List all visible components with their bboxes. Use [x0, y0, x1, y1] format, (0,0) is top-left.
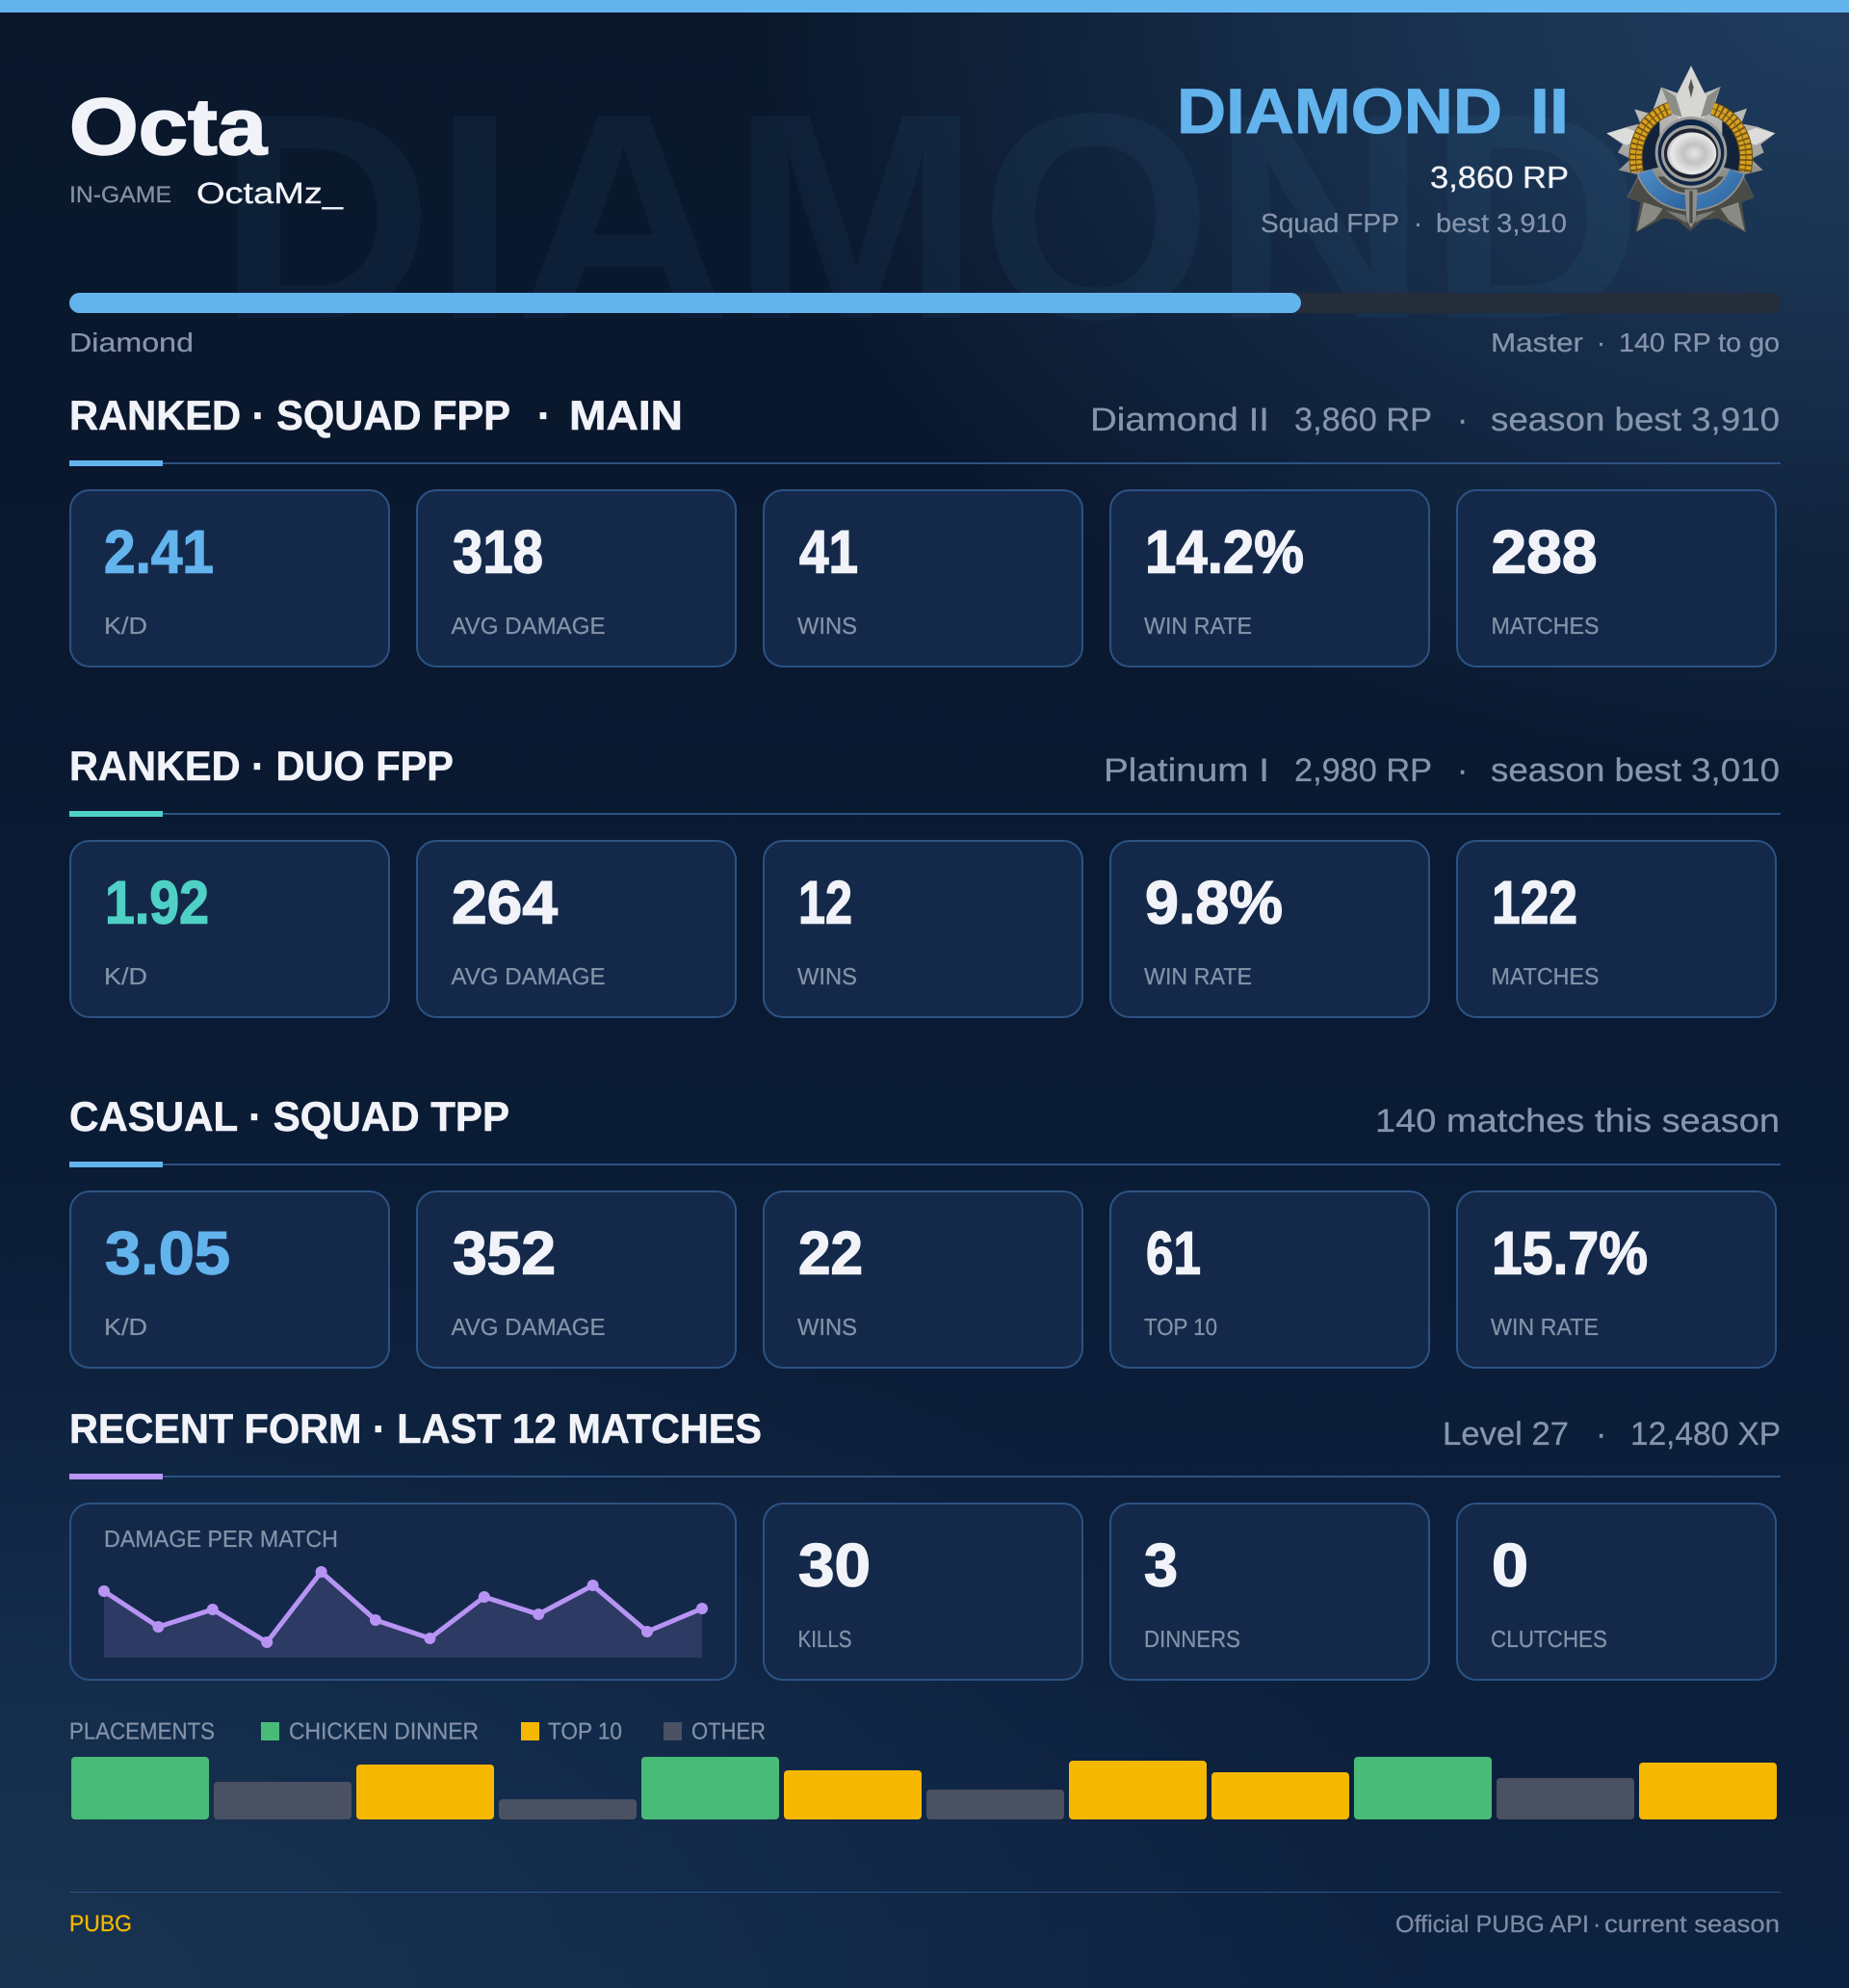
stat card: K/D: 1.92: [105, 869, 209, 936]
stat card: matches: MATCHES: [1491, 964, 1599, 990]
panel: ranked squad stats: [70, 490, 1776, 667]
footer source: official API note: [1395, 1911, 1780, 1938]
section meta: ·: [1457, 752, 1468, 789]
footer brand: PUBG: [69, 1911, 132, 1937]
footer source: official API note: ·: [1593, 1911, 1601, 1938]
section accent: [69, 460, 163, 466]
legend: top 10: TOP 10: [548, 1718, 622, 1745]
legend title: PLACEMENTS: [69, 1718, 215, 1745]
in-game name row: [69, 176, 344, 210]
section title: CASUAL · SQUAD TPP: [69, 1094, 509, 1140]
stat card: wins: [764, 841, 1082, 1017]
stat card: matches: [1457, 841, 1776, 1017]
stat card: wins: [764, 1191, 1082, 1368]
section meta: ·: [1596, 1416, 1606, 1452]
stat card: win rate: 15.7%: [1492, 1219, 1648, 1287]
section accent: [69, 811, 163, 817]
section accent: [69, 1162, 163, 1167]
stat card: matches: 288: [1491, 518, 1597, 586]
rank mode and best: ·: [1414, 208, 1422, 238]
icon: diamond rank medal: [1606, 65, 1775, 233]
next tier label: ·: [1597, 327, 1605, 357]
stat card: clutches: [1457, 1504, 1776, 1680]
stat card: K/D: K/D: [104, 1315, 147, 1341]
stat card: K/D: K/D: [104, 964, 147, 990]
stat card: win rate: 14.2%: [1145, 518, 1304, 586]
footer source: official API note: Official PUBG API: [1395, 1911, 1589, 1938]
progress fill: [69, 293, 1301, 313]
stat card: win rate: [1110, 490, 1429, 667]
placements bar chart: [71, 1757, 1777, 1819]
stat card: avg damage: 318: [453, 518, 543, 586]
watermark: DIAMOND: DIAMOND: [218, 52, 1643, 380]
stat card: wins: 12: [798, 869, 852, 936]
section meta: season best 3,010: [1491, 752, 1780, 789]
footer source: official API note: current season: [1604, 1911, 1780, 1938]
rank mode and best: [1261, 208, 1567, 238]
stat card: win rate: WIN RATE: [1144, 614, 1252, 640]
stat card: win rate: 9.8%: [1145, 869, 1283, 936]
section title: MAIN: [569, 393, 683, 439]
next tier label: [1491, 327, 1780, 357]
stat card: dinners: [1110, 1504, 1429, 1680]
stat card: matches: [1457, 490, 1776, 667]
next tier label: Master: [1491, 327, 1583, 357]
stat card: kills: 30: [798, 1531, 871, 1599]
panel: ranked duo stats: [70, 841, 1776, 1017]
stat card: win rate: WIN RATE: [1491, 1315, 1599, 1341]
stat card: dinners: DINNERS: [1144, 1627, 1240, 1653]
section meta: [1104, 752, 1780, 789]
stat card: wins: 41: [799, 518, 858, 586]
footer: [69, 1892, 1781, 1938]
chart label: DAMAGE PER MATCH: [104, 1527, 338, 1553]
stat card: clutches: CLUTCHES: [1491, 1627, 1607, 1653]
panel: recent form stats: [764, 1504, 1776, 1680]
rank summary block: [1177, 75, 1569, 238]
section meta: Level 27: [1443, 1416, 1569, 1452]
stat card: avg damage: AVG DAMAGE: [451, 1315, 605, 1341]
in-game handle: OctaMz_: [196, 176, 344, 210]
stat card: avg damage: [417, 1191, 736, 1368]
legend: top 10: [521, 1718, 622, 1745]
stat card: K/D: 3.05: [105, 1219, 230, 1287]
panel: casual squad stats: [70, 1191, 1776, 1368]
progress track: [69, 293, 1781, 313]
stat card: wins: WINS: [797, 614, 857, 640]
stat card: top 10: 61: [1146, 1219, 1201, 1287]
legend: other: OTHER: [691, 1718, 766, 1745]
stat card: K/D: [70, 490, 389, 667]
section header: ranked squad: [69, 393, 1781, 466]
stat card: K/D: 2.41: [104, 518, 214, 586]
stat card: avg damage: AVG DAMAGE: [451, 614, 605, 640]
rank points: 3,860 RP: [1430, 160, 1569, 195]
section title: RANKED · DUO FPP: [69, 744, 454, 790]
rank name: DIAMOND: [1177, 75, 1502, 146]
stat card: wins: WINS: [797, 1315, 857, 1341]
section meta: season best 3,910: [1491, 402, 1780, 438]
section meta: 140 matches this season: [1375, 1103, 1780, 1139]
placements legend: [69, 1718, 766, 1745]
stat card: avg damage: [417, 841, 736, 1017]
stat card: K/D: [70, 841, 389, 1017]
section header: recent form: [69, 1406, 1781, 1479]
stat card: win rate: WIN RATE: [1144, 964, 1252, 990]
section meta: 12,480 XP: [1630, 1416, 1781, 1452]
stat card: avg damage: AVG DAMAGE: [451, 964, 605, 990]
section title: RECENT FORM · LAST 12 MATCHES: [69, 1406, 762, 1452]
stat card: kills: KILLS: [797, 1627, 851, 1653]
stat card: K/D: [70, 1191, 389, 1368]
section meta: Platinum I: [1104, 752, 1269, 789]
section meta: Diamond II: [1090, 402, 1269, 438]
section title: ·: [537, 393, 551, 439]
stat card: avg damage: 352: [453, 1219, 556, 1287]
section meta: ·: [1457, 402, 1468, 438]
rank mode and best: best 3,910: [1436, 208, 1567, 238]
top accent bar: [0, 0, 1849, 13]
section meta: 3,860 RP: [1294, 402, 1432, 438]
stat card: win rate: [1110, 841, 1429, 1017]
in-game label: IN-GAME: [69, 182, 171, 208]
stat card: wins: [764, 490, 1082, 667]
section header: casual squad: [69, 1094, 1781, 1167]
section accent: [69, 1474, 163, 1479]
stat card: K/D: K/D: [104, 614, 147, 640]
section meta: [1443, 1416, 1781, 1452]
section meta: 2,980 RP: [1294, 752, 1432, 789]
stat card: matches: MATCHES: [1491, 614, 1599, 640]
next tier label: 140 RP to go: [1619, 327, 1780, 357]
legend: other: [664, 1718, 766, 1745]
section meta: [1090, 402, 1780, 438]
stat card: avg damage: 264: [452, 869, 558, 936]
stat card: top 10: TOP 10: [1144, 1315, 1217, 1341]
line chart: [98, 1566, 708, 1658]
section header: ranked duo: [69, 744, 1781, 817]
stat card: top 10: [1110, 1191, 1429, 1368]
stat card: wins: 22: [798, 1219, 863, 1287]
rank name: II: [1530, 75, 1569, 146]
stat card: dinners: 3: [1144, 1531, 1178, 1599]
stat card: matches: 122: [1492, 869, 1577, 936]
section title: RANKED · SQUAD FPP: [69, 393, 510, 439]
legend: chicken dinner: CHICKEN DINNER: [289, 1718, 479, 1745]
rank mode and best: Squad FPP: [1261, 208, 1399, 238]
stat card: avg damage: [417, 490, 736, 667]
tier progress bar: [69, 293, 1781, 313]
stat card: kills: [764, 1504, 1082, 1680]
stat card: clutches: 0: [1492, 1531, 1528, 1599]
panel: damage per match chart: [70, 1504, 736, 1680]
stat card: wins: WINS: [797, 964, 857, 990]
player name heading: Octa: [69, 82, 268, 171]
stat card: win rate: [1457, 1191, 1776, 1368]
current tier label: Diamond: [69, 327, 194, 357]
